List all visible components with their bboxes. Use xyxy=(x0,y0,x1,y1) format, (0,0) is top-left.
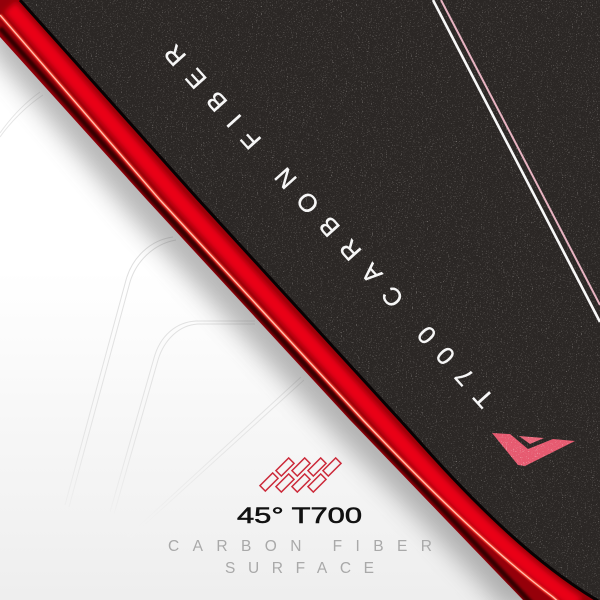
white and pink diagonal stripes xyxy=(433,0,600,322)
subheading line 2: SURFACE xyxy=(225,560,374,577)
subheading line 1: CARBON FIBER xyxy=(168,538,432,555)
brand logo chevron xyxy=(492,433,575,466)
rotated label: T700 CARBON FIBER: T700 CARBON FIBER xyxy=(159,39,499,413)
heading: 45° T700 xyxy=(237,503,362,528)
icon: carbon weave bricks xyxy=(260,458,341,492)
ghost outline lines xyxy=(0,92,304,538)
